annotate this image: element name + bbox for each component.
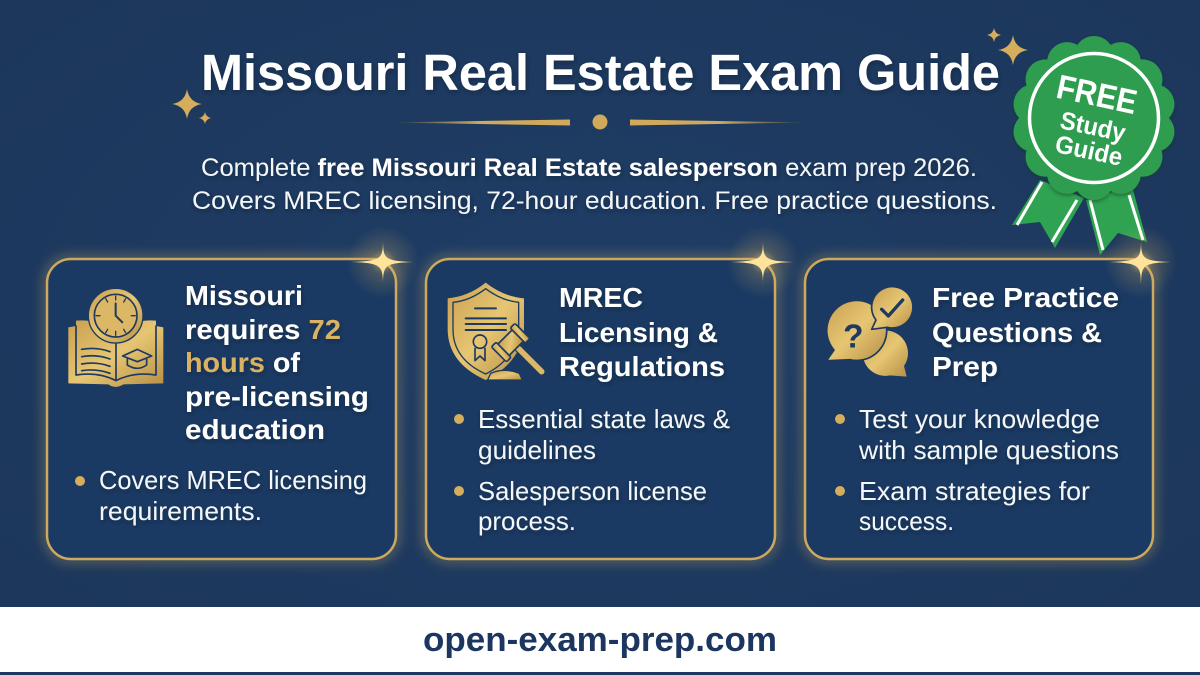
- subtitle: Covers MREC licensing, 72-hour education. Free practice questions.: [192, 187, 997, 215]
- icon: shield and gavel: [448, 283, 542, 380]
- badge ring: [1030, 54, 1158, 182]
- heading: [185, 280, 369, 445]
- panel: MREC licensing and regulations: [426, 226, 799, 559]
- corner flare: [727, 226, 799, 298]
- heading: pre-licensing: [185, 381, 369, 412]
- heading: MREC: [559, 282, 643, 313]
- heading: Missouri: [185, 280, 303, 311]
- panel: pre-licensing education: [47, 226, 419, 559]
- bullet list: [454, 404, 730, 536]
- heading: Prep: [932, 351, 998, 382]
- bullet list: [835, 404, 1119, 536]
- badge ribbons: [1012, 180, 1147, 255]
- badge text: Guide: [1053, 130, 1125, 172]
- bullet list: guidelines: [478, 435, 596, 465]
- bullet list: Salesperson license: [478, 476, 707, 506]
- bullet list: success.: [859, 506, 954, 536]
- panel: free practice questions: [805, 226, 1177, 559]
- bullet list: Essential state laws &: [478, 404, 730, 434]
- heading: [559, 282, 725, 382]
- icon: chat bubbles: [827, 287, 913, 377]
- heading: Regulations: [559, 351, 725, 382]
- bullet list: Exam strategies for: [859, 476, 1090, 506]
- subtitle: Complete free Missouri Real Estate salesperson exam prep 2026.: [201, 154, 977, 182]
- bullet list: with sample questions: [858, 435, 1119, 465]
- heading: [932, 282, 1119, 382]
- footer url: open-exam-prep.com: [423, 621, 777, 659]
- bullet list: Test your knowledge: [859, 404, 1100, 434]
- heading: education: [185, 414, 325, 445]
- corner flare: [347, 226, 419, 298]
- bullet list: requirements.: [99, 496, 262, 526]
- badge: free study guide: [1010, 35, 1178, 255]
- heading: requires 72: [185, 314, 341, 345]
- title: Missouri Real Estate Exam Guide: [201, 44, 1000, 101]
- heading: hours of: [185, 347, 301, 378]
- badge text: Study: [1058, 106, 1128, 148]
- icon: book and clock: [68, 288, 163, 387]
- corner flare: [1105, 226, 1177, 298]
- title divider: [390, 114, 810, 130]
- bullet list: process.: [478, 506, 576, 536]
- icon: sparkles left: [172, 89, 211, 124]
- icon: sparkles right: [987, 28, 1028, 65]
- badge text: [1053, 68, 1140, 172]
- badge text: FREE: [1053, 68, 1140, 122]
- heading: Licensing &: [559, 317, 718, 348]
- subtitle: [192, 154, 997, 215]
- heading: Free Practice: [932, 282, 1119, 313]
- bullet list: [75, 465, 367, 526]
- footer bar: [0, 607, 1200, 675]
- badge rosette: [1010, 35, 1178, 201]
- bullet list: Covers MREC licensing: [99, 465, 367, 495]
- icon: chat bubbles: ?: [843, 318, 864, 355]
- gavel head: [491, 323, 530, 362]
- heading: Questions &: [932, 317, 1102, 348]
